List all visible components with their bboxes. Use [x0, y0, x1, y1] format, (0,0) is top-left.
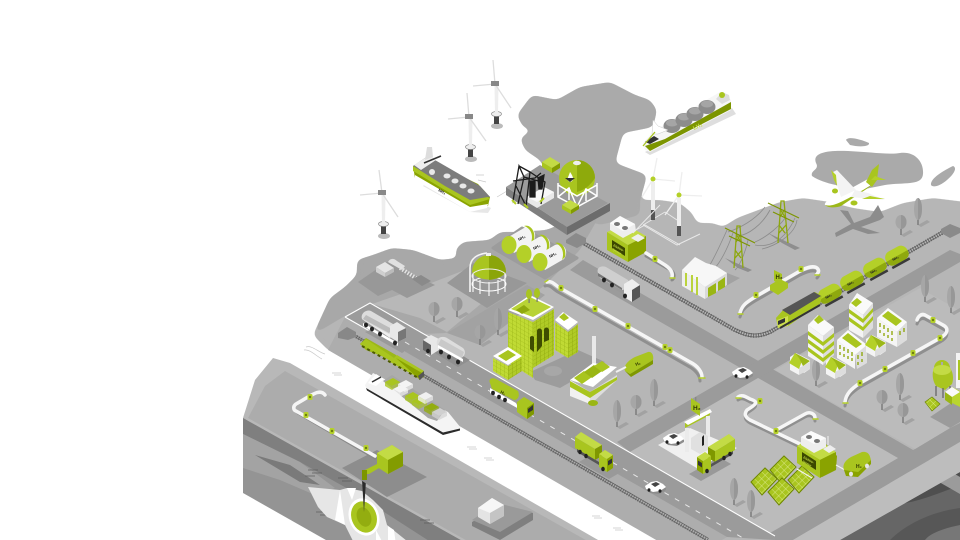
green sphere tank [558, 160, 597, 207]
white tanker truck east [423, 335, 470, 367]
lime tank truck by factory [616, 352, 653, 377]
LNG ship: NH₃ [438, 187, 447, 196]
tall tower 2 [849, 293, 873, 338]
tall tower 1 [808, 315, 834, 365]
turbine 1 [473, 60, 511, 129]
south hydrogen tank trailer: H₂ [856, 464, 862, 470]
road: south-west to north-east avenue [617, 250, 960, 452]
cylinder tanks: NH₃ [548, 251, 557, 259]
plot: sphere tank pad [447, 263, 527, 308]
sphere tank on legs [470, 253, 506, 296]
H2 valve station sign on north pipeline [770, 270, 788, 295]
LNG ship [413, 147, 491, 213]
sphere tank terminal platform [506, 157, 610, 235]
parking-lot equipment [376, 259, 431, 286]
railway buffer: coastal [338, 327, 356, 340]
plot: bottom block [630, 378, 898, 533]
cylinder tanks: NH₃ [517, 234, 526, 242]
pipelines [545, 253, 947, 447]
onshore wind turbines and cabling [642, 158, 702, 245]
locomotive [776, 292, 822, 328]
coast blob: west shore [313, 215, 600, 335]
hydrogen truck on road: H₂ [500, 389, 507, 396]
lower land drilling pad [342, 450, 427, 497]
NH3 labels on train: NH₃ [892, 255, 900, 262]
crane lime feet [512, 198, 544, 208]
coastal rail strip [328, 317, 727, 540]
north electrolyser [607, 205, 680, 262]
NH3 labels on train: NH₃ [847, 280, 855, 287]
trees [428, 198, 960, 519]
cylinder tanks: NH₃ [532, 243, 541, 251]
H2 sign: H₂ [693, 405, 701, 412]
road: outer avenue along edge [770, 423, 960, 540]
plot: parking area [358, 262, 435, 298]
offshore wind turbines [360, 60, 511, 239]
north white building [682, 257, 740, 299]
railway buffers [566, 224, 960, 248]
lime passenger train [360, 338, 424, 380]
island: small north [846, 138, 869, 146]
lower land: inner darker surface [248, 371, 600, 540]
lime box front [562, 200, 579, 214]
coastal road [345, 303, 775, 540]
lower land: cross-section layers [243, 418, 475, 540]
pylon 1 [725, 226, 755, 272]
white cars [645, 367, 753, 494]
plot: cylinder tanks pad [493, 228, 577, 278]
plot: dark strip by main building [447, 285, 545, 345]
south hydrogen tank trailer [843, 452, 871, 477]
lime tank truck by factory: H₂ [635, 360, 641, 367]
main lime building [493, 288, 605, 388]
plot: west lighter ground [372, 268, 500, 332]
H2 fueling station [658, 397, 737, 481]
south electrolyser: lyseur [802, 459, 813, 468]
south electrolyser [797, 431, 845, 478]
hydrogen truck on road [489, 378, 534, 419]
white tanker truck west [362, 310, 412, 353]
margin: lighter edge strip [793, 442, 960, 540]
right annex [555, 312, 578, 358]
island: small east [931, 166, 955, 186]
city buildings [789, 293, 907, 379]
road patch: east corner [930, 397, 960, 428]
road border lines and dashes [345, 303, 775, 540]
lower land: surface [243, 358, 612, 540]
LH2 ship: LH₂ [692, 122, 704, 132]
landmass: main ground [313, 82, 960, 540]
small white factory with chimney [570, 336, 617, 406]
NH3 labels on train [825, 255, 900, 300]
LH2 ship [643, 92, 736, 155]
south electrolyser: Elektro- [802, 455, 815, 465]
side cross-section: right corner [840, 472, 960, 540]
north electrolyser: Elektro- [612, 243, 625, 253]
pylon 2 [768, 201, 800, 250]
wave marks [304, 175, 623, 530]
north electrolyser: lyseur [612, 247, 623, 256]
pipeline east [843, 314, 947, 406]
north railway with curve [578, 230, 945, 337]
lime storage box [542, 157, 560, 173]
front block [493, 347, 522, 380]
coastal railway [349, 332, 708, 540]
NH3 labels on train: NH₃ [870, 268, 878, 275]
houses [789, 335, 886, 379]
plot: right block [775, 288, 960, 449]
NH3 labels on train: NH₃ [825, 293, 833, 300]
east end tanks [925, 353, 960, 411]
pipeline north-west [646, 253, 675, 280]
solar panels [751, 456, 814, 505]
plane shadow [835, 205, 884, 237]
pylon cables [708, 207, 797, 270]
north freight train [776, 243, 912, 328]
white unit [527, 187, 554, 208]
black loading crane [513, 166, 545, 207]
cylinder tanks [502, 226, 566, 271]
turbine 2 [448, 93, 486, 162]
pipeline by H2 sign [738, 266, 820, 317]
lower land compressor box [362, 445, 403, 480]
pipeline central long [545, 280, 705, 381]
lower land pipeline [294, 392, 375, 458]
island: airport patch [812, 151, 923, 190]
building B [877, 308, 907, 347]
tower [508, 288, 554, 378]
pipeline bottom plot [736, 396, 818, 447]
H2 valve station sign on north pipeline: H₂ [776, 275, 783, 281]
road: north-west to south-east avenue [570, 260, 960, 494]
building A [837, 330, 867, 369]
turbine 3 [360, 170, 398, 239]
lime truck on road [575, 432, 621, 479]
coast blob: north [517, 82, 657, 225]
sea channel [290, 350, 670, 540]
airplane [825, 164, 886, 207]
lower land building pad [472, 498, 533, 540]
cavern and storage: underground reservoir [308, 470, 412, 540]
silver tanker truck [598, 266, 640, 302]
cargo barge [365, 373, 461, 438]
